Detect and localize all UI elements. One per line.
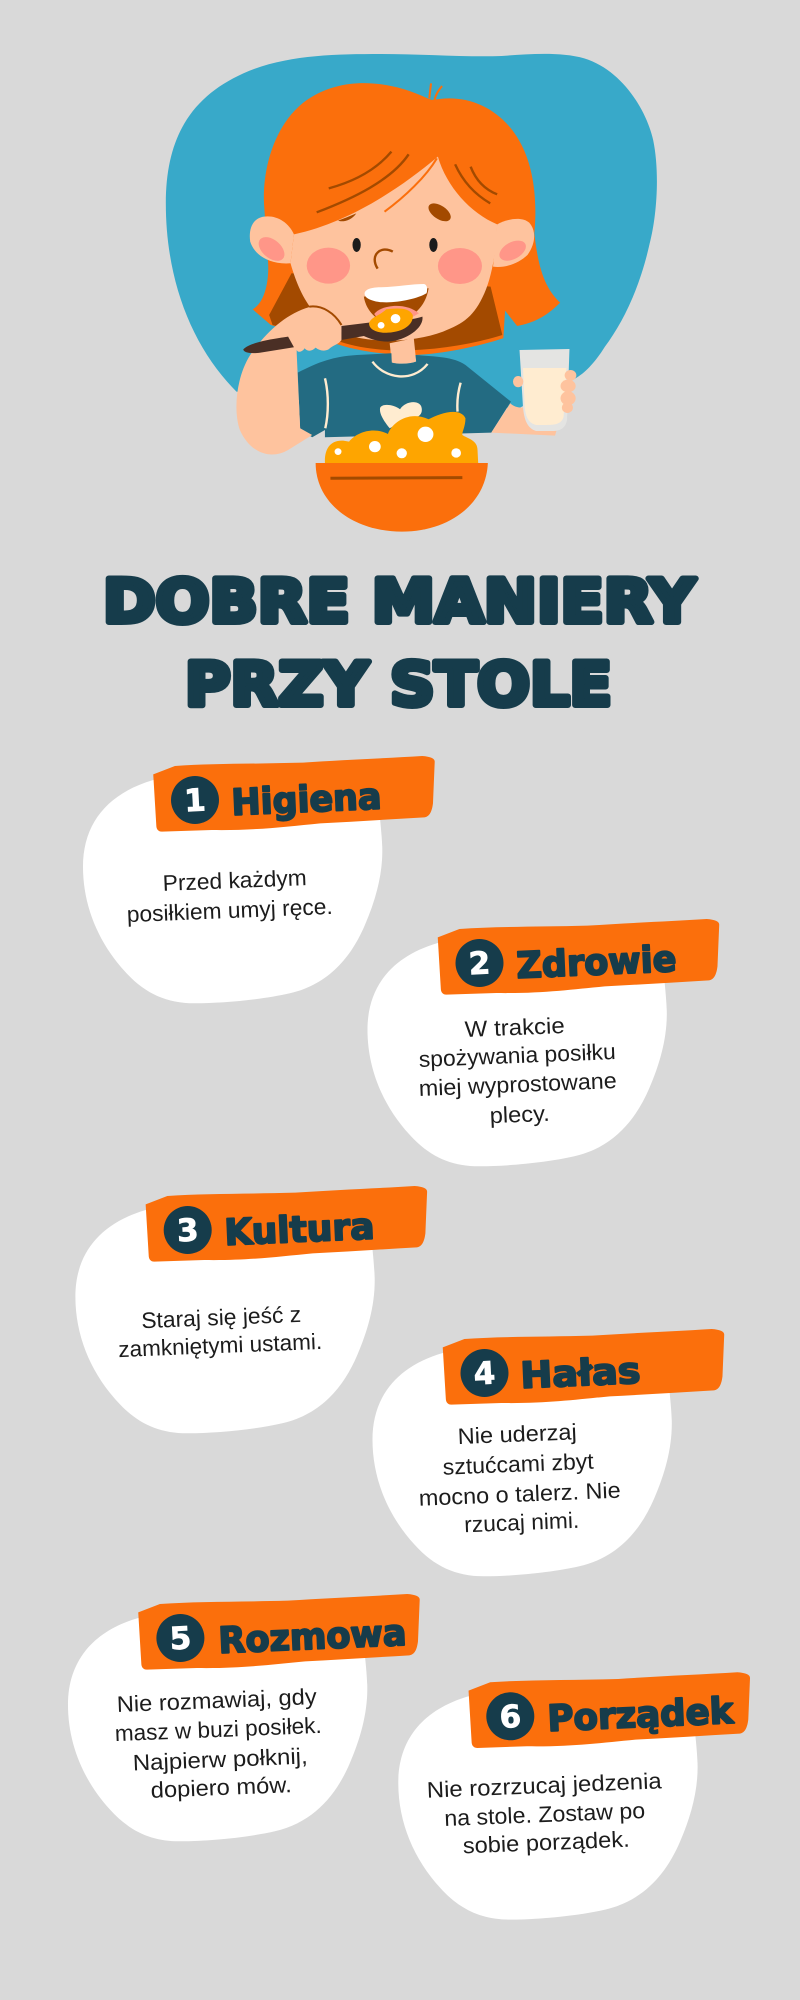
card blob — [83, 780, 382, 1003]
face — [291, 157, 497, 341]
panel: 4 Hałas — [372, 1329, 724, 1576]
body text: sztućcami zbyt — [442, 1449, 595, 1480]
ears — [250, 216, 534, 267]
title — [103, 567, 697, 720]
hair — [253, 83, 560, 355]
panel: 5 Rozmowa — [68, 1594, 420, 1841]
body text: Nie rozmawiaj, gdy — [116, 1684, 318, 1717]
number badge: 3 — [176, 1212, 199, 1250]
illustration: girl eating at the table — [166, 54, 657, 532]
body text: Nie uderzaj — [457, 1419, 577, 1449]
eyes — [352, 238, 438, 252]
heading: Kultura — [224, 1206, 375, 1254]
body text: Nie rozrzucaj jedzenia — [426, 1768, 663, 1803]
body text — [426, 1768, 663, 1858]
nose — [375, 250, 393, 269]
body text — [114, 1684, 322, 1803]
body text: posiłkiem umyj ręce. — [126, 894, 333, 927]
body text: W trakcie — [464, 1013, 565, 1042]
panel: 1 Higiena — [83, 756, 435, 1003]
mouth — [364, 284, 429, 323]
number badge: 5 — [169, 1620, 192, 1658]
card blob — [68, 1618, 367, 1841]
body text: miej wyprostowane — [418, 1068, 617, 1101]
shirt seams and collar — [325, 362, 461, 428]
heading: Porządek — [547, 1691, 735, 1740]
other forearm — [491, 403, 557, 436]
number badge — [486, 1692, 534, 1740]
heading banner — [438, 919, 719, 995]
heading banner — [469, 1672, 750, 1748]
heading: Higiena — [231, 776, 382, 824]
hair tuft — [429, 83, 442, 100]
body text: na stole. Zostaw po — [444, 1798, 646, 1831]
panel: 6 Porządek — [398, 1672, 750, 1920]
neck — [390, 338, 416, 364]
heart on shirt — [380, 402, 422, 428]
finger line — [309, 306, 341, 325]
number badge: 4 — [473, 1355, 496, 1393]
body text: mocno o talerz. Nie — [418, 1478, 621, 1511]
body text: plecy. — [489, 1101, 550, 1128]
blue background blob — [166, 54, 657, 408]
heading: Zdrowie — [516, 939, 677, 987]
title: PRZY STOLE — [185, 650, 612, 720]
body text: sobie porządek. — [462, 1827, 630, 1858]
fringe strand — [385, 158, 437, 212]
title: DOBRE MANIERY — [103, 567, 697, 637]
body text — [418, 1013, 617, 1128]
body text: Najpierw połknij, — [132, 1744, 308, 1776]
body text: rzucaj nimi. — [464, 1508, 580, 1537]
card blob — [372, 1353, 672, 1576]
body text: Przed każdym — [162, 865, 307, 896]
number badge — [156, 1614, 204, 1662]
heading banner — [146, 1186, 427, 1262]
card blob — [367, 943, 667, 1166]
body text: masz w buzi posiłek. — [114, 1713, 322, 1746]
number badge — [460, 1349, 508, 1397]
arm and hand — [236, 307, 341, 454]
hair shadow — [269, 273, 502, 351]
bowl — [316, 463, 488, 532]
number badge — [456, 939, 504, 987]
body text — [118, 1302, 323, 1362]
cheeks — [307, 248, 482, 284]
panel: 3 Kultura — [75, 1186, 427, 1433]
food on spoon — [369, 308, 413, 333]
body text: dopiero mów. — [150, 1772, 292, 1803]
heading banner — [153, 756, 435, 832]
body text — [126, 865, 333, 927]
body text: zamkniętymi ustami. — [118, 1329, 323, 1362]
number badge: 2 — [468, 945, 491, 983]
heading: Rozmowa — [218, 1613, 407, 1662]
body text — [418, 1419, 621, 1537]
heading banner — [138, 1594, 420, 1670]
card blob — [75, 1210, 375, 1433]
glass of milk — [513, 349, 576, 431]
number badge — [164, 1206, 212, 1254]
body text: Staraj się jeść z — [141, 1302, 302, 1333]
heading banner — [443, 1329, 724, 1405]
card blob — [398, 1696, 698, 1920]
number badge — [171, 776, 219, 824]
number badge: 1 — [183, 782, 207, 820]
spoon — [243, 317, 423, 353]
heading: Hałas — [520, 1351, 641, 1397]
number badge: 6 — [499, 1699, 522, 1736]
shirt — [298, 353, 511, 437]
panel: 2 Zdrowie — [367, 919, 719, 1166]
eyebrows — [338, 200, 454, 225]
food in bowl — [325, 412, 478, 463]
body text: spożywania posiłku — [418, 1039, 616, 1072]
hair strands — [317, 152, 497, 212]
